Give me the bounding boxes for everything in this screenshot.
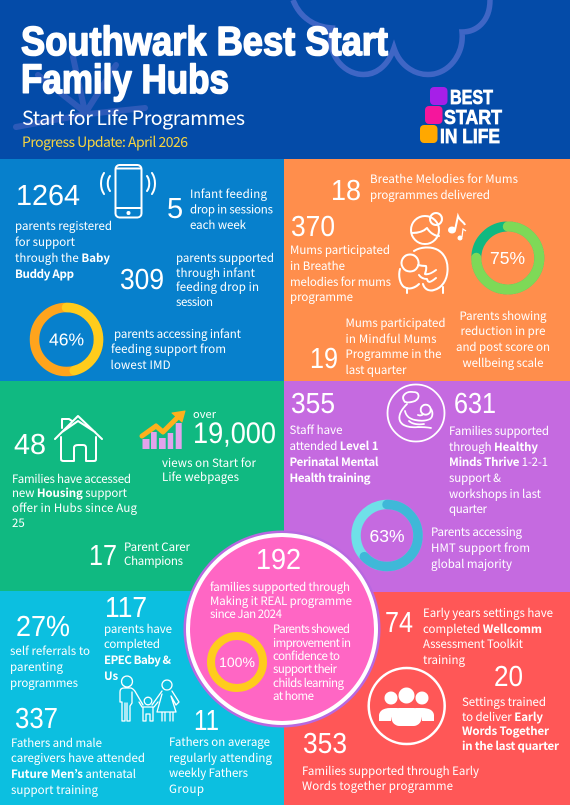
icon: phone — [101, 165, 155, 218]
stat: 19: in Mindful Mums — [346, 331, 436, 347]
stat: 17: 17 — [89, 540, 117, 572]
logo: Best Start in Life: IN LIFE — [440, 126, 500, 148]
donut: 63% — [356, 504, 418, 566]
stat: 27% — [10, 611, 90, 691]
stat: 353: 353 — [303, 728, 347, 760]
donut: 63%: 63% — [369, 526, 405, 546]
text: confidence — [273, 621, 351, 704]
icon: family — [120, 676, 179, 721]
panel: perinatal and HMT — [284, 381, 570, 592]
stat: 631: support & — [449, 470, 501, 486]
stat: 1264: through the Baby — [15, 250, 110, 266]
logo: Best Start in Life: START — [444, 107, 502, 129]
icon: rising chart — [142, 411, 185, 449]
stat: 1264 — [15, 180, 112, 282]
stat: 19: 19 — [310, 343, 338, 375]
donut: 46%: 46% — [49, 330, 84, 350]
stat: 17 — [89, 539, 191, 572]
stat: 74: 74 — [385, 607, 413, 639]
stat: 631: Minds Thrive 1-2-1 — [449, 454, 548, 470]
stat: 19: last quarter — [346, 362, 407, 378]
stat: 74: completed Wellcomm — [423, 621, 542, 637]
stat: 309: through infant — [176, 265, 256, 281]
title: Southwark Best Start — [21, 18, 388, 64]
text: global majority — [431, 524, 530, 572]
text: wellbeing scale: Parents showing — [460, 308, 547, 324]
stat: 355: attended Level 1 — [290, 438, 379, 454]
panel: header — [0, 0, 570, 159]
stat: 20 — [462, 661, 560, 754]
stat: 20: Words Together — [462, 723, 550, 739]
stat: 117 — [104, 592, 172, 684]
stat: 370: 370 — [291, 211, 335, 243]
text: wellbeing scale: and post score on — [456, 339, 550, 355]
stat: 353: Families supported through Early — [302, 763, 479, 779]
stat: 337: 337 — [15, 703, 58, 735]
donut: 46% — [34, 308, 98, 372]
text: wellbeing scale: reduction in pre — [460, 323, 546, 339]
text: confidence: childs learning — [273, 675, 344, 691]
donut: 100%: 100% — [219, 654, 255, 670]
stat: 309: session — [176, 294, 213, 310]
stat: 74: training — [423, 652, 466, 668]
icon: group of people — [369, 668, 445, 744]
stat: 11: Group — [169, 781, 204, 797]
stat: 370 — [290, 211, 391, 305]
stat: 370: melodies for mums — [290, 274, 391, 290]
stat: 337: Fathers and male — [11, 735, 102, 751]
text: wellbeing scale: wellbeing scale — [462, 355, 544, 371]
stat: 192: since Jan 2024 — [210, 606, 283, 622]
stat: 11: weekly Fathers — [169, 765, 248, 781]
stat: 1264: Buddy App — [15, 266, 74, 282]
stat: 192: families supported through — [210, 579, 350, 595]
stat: 19,000 views: over — [193, 406, 217, 422]
title: Family Hubs — [21, 56, 229, 102]
logo: Best Start in Life: BEST — [450, 87, 493, 109]
panel: infant feeding — [0, 159, 284, 381]
stat: 309 — [120, 250, 274, 310]
stat: 11: regularly attending — [169, 750, 272, 766]
progress update date: Progress Update: April 2026 — [22, 132, 188, 152]
logo: Best Start in Life — [420, 87, 502, 148]
icon: mother holding baby — [388, 384, 444, 442]
stat: 17: Parent Carer — [124, 539, 191, 555]
stat: 631: Families supported — [449, 423, 549, 439]
stat: 631: workshops in last — [449, 486, 542, 502]
text: lowest IMD: feeding support from — [111, 341, 226, 357]
stat: 27%: 27% — [16, 611, 70, 643]
stat: 370: programme — [290, 289, 353, 305]
text: global majority: HMT support from — [431, 540, 530, 556]
text: lowest IMD — [110, 326, 242, 373]
stat: 74 — [385, 605, 553, 668]
stat: 370: in Breathe — [290, 258, 345, 274]
stat: 117: 117 — [105, 592, 147, 624]
stat: 1264: 1264 — [16, 180, 80, 212]
stat: 353: Words together programme — [302, 778, 453, 794]
stat: 370: Mums participated — [290, 242, 390, 258]
text: confidence: support their — [273, 661, 338, 677]
stat: 355 — [290, 388, 379, 486]
stat: 192: Making it REAL programme — [210, 593, 352, 609]
text: confidence: at home — [273, 688, 314, 704]
panel: parenting and fathers — [0, 591, 284, 805]
panel: Breathe Melodies — [284, 159, 570, 381]
stat: 18: 18 — [331, 175, 361, 207]
stat: 5 — [167, 186, 273, 233]
stat: 20: Settings trained — [462, 694, 546, 710]
stat: 192 — [210, 544, 352, 622]
stat: 18 — [331, 171, 518, 207]
panel: Making it REAL circle — [184, 530, 380, 728]
stat: 74: Assessment Toolkit — [423, 636, 524, 652]
stat: 48: new Housing support — [12, 485, 128, 501]
stat: 27%: programmes — [10, 675, 78, 691]
stat: 631: 631 — [454, 388, 496, 420]
stat: 355: Staff have — [290, 422, 342, 438]
stat: 48: Families have accessed — [12, 471, 131, 487]
panel: early words — [284, 592, 570, 805]
stat: 17: Champions — [124, 553, 183, 569]
stat: 19,000 views — [162, 406, 276, 485]
text: global majority: Parents accessing — [431, 524, 522, 540]
stat: 11: 11 — [194, 705, 219, 737]
stat: 355: 355 — [291, 388, 335, 420]
stat: 309: parents supported — [176, 250, 274, 266]
stat: 19,000 views: views on Start for — [162, 455, 257, 471]
stat: 19: Mums participated — [346, 315, 446, 331]
stat: 117: Us — [104, 668, 119, 684]
icon: house — [55, 416, 102, 461]
text: confidence: Parents showed — [273, 621, 350, 637]
stat: 20: to deliver Early — [462, 709, 543, 725]
title — [21, 18, 388, 102]
stat: 1264: parents registered — [15, 218, 112, 234]
stat: 20: 20 — [494, 661, 523, 693]
text: wellbeing scale — [456, 308, 550, 371]
icon: mother and baby with music note — [399, 213, 466, 293]
stat: 48: 48 — [14, 429, 46, 461]
stat: 20: in the last quarter — [462, 738, 560, 754]
donut: 75%: 75% — [490, 248, 525, 268]
stat: 117: parents have — [104, 621, 172, 637]
text: lowest IMD: parents accessing infant — [114, 326, 242, 342]
stat: 19: Programme in the — [346, 346, 442, 362]
text: lowest IMD: lowest IMD — [110, 357, 171, 373]
stat: 192: 192 — [256, 544, 301, 576]
stat: 18: Breathe Melodies for Mums — [370, 171, 518, 187]
stat: 1264: for support — [15, 234, 76, 250]
stat: 5: Infant feeding — [190, 186, 268, 202]
text: confidence: confidence to — [273, 648, 340, 664]
stat: 19 — [310, 315, 446, 378]
stat: 631 — [449, 388, 549, 517]
panel: housing and webpages — [0, 381, 284, 591]
donut: 100% — [211, 636, 263, 688]
text: confidence: improvement in — [273, 635, 351, 651]
stat: 18: programmes delivered — [370, 187, 490, 203]
stat: 11 — [169, 705, 272, 797]
stat: 48: 25 — [12, 515, 25, 531]
stat: 117: EPEC Baby & — [104, 652, 171, 668]
stat: 5: drop in sessions — [190, 202, 273, 218]
stat: 355: Perinatal Mental — [290, 454, 379, 470]
stat: 309: feeding drop in — [176, 279, 259, 295]
stat: 117: completed — [104, 636, 160, 652]
stat: 353 — [302, 728, 479, 794]
stat: 337: support training — [11, 782, 98, 798]
stat: 337: caregivers have attended — [11, 750, 145, 766]
stat: 11: Fathers on average — [169, 734, 270, 750]
stat: 27%: parenting — [10, 659, 64, 675]
stat: 355: Health training — [290, 470, 371, 486]
stat: 5: each week — [190, 217, 247, 233]
text: global majority: global majority — [431, 556, 512, 572]
stat: 337 — [11, 703, 145, 798]
stat: 48 — [12, 429, 138, 531]
stat: 631: quarter — [449, 501, 488, 517]
stat: 74: Early years settings have — [423, 605, 553, 621]
stat: 19,000 views: 19,000 — [193, 417, 276, 450]
stat: 631: through Healthy — [449, 439, 538, 455]
stat: 5: 5 — [167, 193, 183, 225]
stat: 309: 309 — [120, 264, 164, 296]
donut: 75% — [476, 226, 539, 290]
stat: 337: Future Men’s antenatal — [11, 766, 136, 782]
stat: 19,000 views: Life webpages — [162, 469, 239, 485]
stat: 27%: self referrals to — [10, 643, 90, 659]
stat: 48: offer in Hubs since Aug — [12, 500, 138, 516]
subtitle: Start for Life Programmes — [22, 102, 245, 131]
